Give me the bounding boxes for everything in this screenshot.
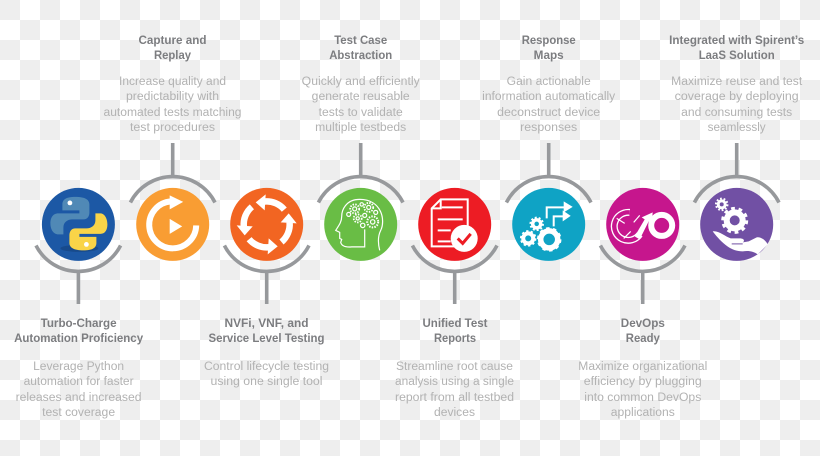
connector: devops bottom arc and stem: [600, 246, 685, 304]
text: Integrated with Spirent's LaaS Solution: LaaS Solution: [699, 50, 775, 62]
connector: python bottom arc and stem: [36, 246, 121, 304]
text: DevOps Ready: efficiency by plugging: [584, 376, 702, 388]
icon: python logo: [42, 188, 115, 261]
text: Test Case Abstraction: Abstraction: [329, 50, 392, 62]
text: Capture and Replay: Replay: [154, 50, 192, 62]
text: Test Case Abstraction: tests to validate: [319, 107, 403, 119]
text: Response Maps: information automatically: [482, 91, 615, 103]
text: NVFi, VNF, and Service Level Testing: [204, 318, 329, 388]
text: DevOps Ready: [578, 318, 707, 419]
text: Integrated with Spirent's LaaS Solution: Maximize reuse and test: [671, 76, 803, 88]
text: Capture and Replay: automated tests matching: [104, 107, 242, 119]
text: Integrated with Spirent's LaaS Solution: and consuming tests: [681, 107, 792, 119]
text: Unified Test Reports: Reports: [434, 333, 476, 345]
text: DevOps Ready: Maximize organizational: [578, 361, 707, 373]
text: Turbo-Charge Automation Proficiency: releases and increased: [16, 392, 142, 404]
text: Capture and Replay: predictability with: [126, 91, 219, 103]
text: Unified Test Reports: report from all testbed: [395, 392, 514, 404]
text: NVFi, VNF, and Service Level Testing: NVFi, VNF, and: [224, 318, 308, 330]
text: DevOps Ready: DevOps: [621, 318, 665, 330]
text: Capture and Replay: Capture and: [138, 35, 206, 47]
connector: capture top arc and stem: [130, 143, 215, 202]
text: Turbo-Charge Automation Proficiency: Turbo-Charge: [41, 318, 117, 330]
text: Turbo-Charge Automation Proficiency: automation for faster: [24, 376, 134, 388]
text: Response Maps: Gain actionable: [507, 76, 591, 88]
connector: NVFi bottom arc and stem: [224, 246, 309, 304]
text: DevOps Ready: applications: [611, 407, 675, 419]
text: Response Maps: deconstruct device: [497, 107, 600, 119]
text: Test Case Abstraction: generate reusable: [312, 91, 410, 103]
text: Unified Test Reports: Unified Test: [422, 318, 488, 330]
text: Unified Test Reports: [395, 318, 514, 419]
text: Turbo-Charge Automation Proficiency: [14, 318, 144, 419]
text: Integrated with Spirent's LaaS Solution: seamlessly: [708, 122, 766, 134]
text: Integrated with Spirent's LaaS Solution: [669, 35, 804, 134]
text: Test Case Abstraction: multiple testbeds: [315, 122, 406, 134]
icon: hand holding gears: [700, 188, 773, 261]
text: Unified Test Reports: Streamline root cause: [396, 361, 513, 373]
icon: devops infinity: [606, 188, 679, 261]
connector: test case top arc and stem: [318, 143, 403, 202]
text: NVFi, VNF, and Service Level Testing: using one single tool: [210, 376, 322, 388]
text: NVFi, VNF, and Service Level Testing: Control lifecycle testing: [204, 361, 329, 373]
text: DevOps Ready: Ready: [626, 333, 660, 345]
text: Unified Test Reports: devices: [434, 407, 475, 419]
text: Response Maps: responses: [520, 122, 577, 134]
text: Integrated with Spirent's LaaS Solution: Integrated with Spirent’s: [669, 35, 804, 47]
text: Unified Test Reports: analysis using a single: [395, 376, 514, 388]
text: Test Case Abstraction: [302, 35, 420, 134]
text: Capture and Replay: test procedures: [130, 122, 215, 134]
text: Test Case Abstraction: Quickly and efficiently: [302, 76, 420, 88]
text: Capture and Replay: Increase quality and: [119, 76, 226, 88]
icon: gears with arrows: [512, 188, 585, 261]
connector: LaaS top arc and stem: [694, 143, 779, 202]
text: DevOps Ready: into common DevOps: [584, 392, 702, 404]
text: Integrated with Spirent's LaaS Solution: coverage by deploying: [675, 91, 799, 103]
text: Response Maps: Response: [522, 35, 576, 47]
text: Turbo-Charge Automation Proficiency: test coverage: [42, 407, 115, 419]
text: Capture and Replay: [104, 35, 242, 134]
icon: report with check: [418, 188, 491, 261]
text: Response Maps: Maps: [534, 50, 564, 62]
connector: response maps top arc and stem: [506, 143, 591, 202]
connector: reports bottom arc and stem: [412, 246, 497, 304]
text: Turbo-Charge Automation Proficiency: Automation Proficiency: [14, 333, 144, 345]
icon: head with gears: [324, 188, 397, 261]
text: Turbo-Charge Automation Proficiency: Leverage Python: [33, 361, 124, 373]
text: Response Maps: [482, 35, 615, 134]
icon: replay arrow: [136, 188, 209, 261]
text: Test Case Abstraction: Test Case: [334, 35, 387, 47]
icon: lifecycle circular arrows: [230, 188, 303, 261]
text: NVFi, VNF, and Service Level Testing: Service Level Testing: [208, 333, 324, 345]
